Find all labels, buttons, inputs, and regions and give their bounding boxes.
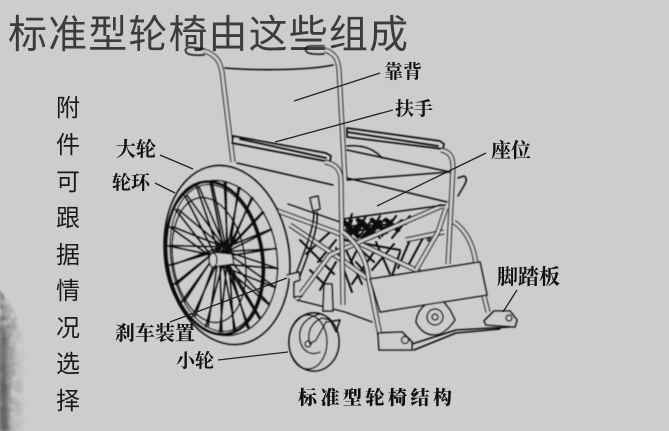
footrest assembly: [343, 222, 517, 350]
side note: attachments chosen as needed: 选: [56, 351, 80, 378]
label: armrest: 扶手: [395, 98, 433, 120]
side note: attachments chosen as needed: 据: [56, 242, 80, 269]
title: 标准型轮椅由这些组成: [8, 14, 408, 57]
label: seat: 座位: [491, 139, 531, 162]
side note: attachments chosen as needed: 况: [56, 315, 80, 342]
right footplate: [484, 311, 517, 327]
icon: push handle grips: [186, 46, 324, 55]
tyre: [152, 156, 302, 354]
left footplate: [378, 327, 510, 350]
scanned edge smudge: [0, 290, 26, 431]
label: large wheel: 大轮: [116, 138, 156, 161]
spokes: [157, 173, 288, 341]
leg strap: [370, 262, 487, 312]
caption: 标准型轮椅结构: [298, 386, 452, 409]
seat: [237, 146, 450, 219]
side note: attachments chosen as needed: [56, 95, 80, 415]
leader lines: [155, 73, 517, 360]
side note: attachments chosen as needed: 可: [56, 169, 80, 196]
big rear wheel: [152, 156, 302, 354]
far-side wheel and under-seat braces: [275, 204, 446, 322]
label: footrest: 脚踏板: [497, 265, 560, 289]
side note: attachments chosen as needed: 择: [56, 388, 80, 415]
small front caster: [289, 284, 340, 371]
label: brake: 刹车装置: [115, 321, 195, 345]
label: hand rim: 轮环: [112, 172, 152, 194]
side note: attachments chosen as needed: 跟: [56, 205, 80, 232]
hub: [209, 252, 234, 267]
wheelchair diagram: [152, 46, 517, 371]
label: backrest: 靠背: [384, 61, 422, 83]
armrests: [232, 128, 466, 305]
side note: attachments chosen as needed: 情: [56, 278, 80, 305]
side note: attachments chosen as needed: 附: [56, 95, 80, 122]
label: small wheel: 小轮: [176, 350, 214, 372]
brake lever: [287, 196, 320, 297]
side note: attachments chosen as needed: 件: [56, 132, 80, 159]
backrest and rear posts: [186, 46, 345, 180]
rim and hand ring: [156, 174, 274, 342]
